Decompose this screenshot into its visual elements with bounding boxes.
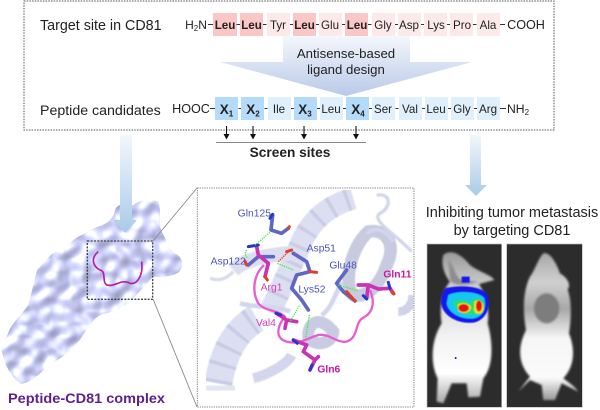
target sequence row: Ala — [480, 19, 497, 32]
target sequence row: Lys — [427, 19, 445, 32]
heading: peptide candidates: Peptide candidates — [40, 103, 161, 119]
candidate sequence row: Leu — [321, 103, 341, 116]
arrow: to tumor inhibition — [465, 135, 487, 196]
arrow: to peptide-CD81 complex — [113, 135, 137, 233]
hydrogen bonds — [245, 232, 358, 338]
target sequence row — [185, 13, 545, 36]
candidate sequence row: 2 — [525, 108, 530, 117]
treated mouse photo — [507, 244, 582, 407]
target sequence row: Leu — [347, 19, 367, 32]
surface blob — [2, 200, 182, 384]
atom tips — [245, 214, 394, 370]
target sequence row: N — [198, 18, 207, 32]
residue labels peptide: Arg1 — [261, 283, 283, 294]
icon: screen site arrows — [224, 126, 359, 140]
candidate sequence row — [172, 97, 530, 120]
residue labels CD81: Glu48 — [329, 260, 357, 271]
panel: binding detail — [197, 188, 414, 407]
heading: target site: Target site in CD81 — [40, 18, 162, 34]
candidate sequence row: 2 — [255, 110, 260, 118]
candidate sequence row: Leu — [426, 103, 446, 116]
candidate sequence row: Arg — [479, 103, 497, 116]
bioluminescence heatmap — [441, 277, 489, 323]
candidate sequence row: HOOC — [172, 102, 210, 116]
peptide residue sticks — [257, 247, 393, 370]
residue labels peptide: Val4 — [256, 318, 276, 329]
candidate sequence row: 1 — [229, 110, 234, 118]
panel: mouse imaging — [427, 244, 582, 407]
zoom connector lines — [153, 188, 197, 407]
text: antisense-based ligand design: ligand design — [307, 62, 385, 77]
candidate sequence row: Gly — [453, 103, 471, 116]
target sequence row: COOH — [507, 18, 545, 32]
target sequence row: Gly — [374, 19, 392, 32]
candidate sequence row: X — [298, 102, 307, 117]
peptide trace — [93, 252, 142, 285]
target sequence row: Leu — [294, 19, 315, 32]
label: peptide-CD81 complex: Peptide-CD81 complex — [8, 391, 166, 406]
candidate sequence row: X — [220, 102, 229, 117]
target sequence row: Glu — [321, 19, 339, 32]
residue labels CD81: Asp51 — [307, 244, 336, 255]
panel: sequence design box — [24, 1, 554, 130]
label: screen sites: Screen sites — [250, 145, 331, 160]
heading: inhibiting tumor metastasis: Inhibiting tumor metastasis — [426, 205, 598, 221]
peptide backbone — [254, 265, 373, 343]
candidate sequence row: X — [351, 102, 360, 117]
target sequence row: Pro — [453, 19, 471, 32]
residue labels peptide: Gln11 — [383, 270, 412, 281]
target sequence row: Asp — [399, 19, 419, 32]
screen sites bracket line — [216, 142, 366, 144]
CD81 residue sticks — [248, 215, 355, 310]
residue labels CD81: Gln125 — [238, 208, 271, 219]
residue labels peptide: Gln6 — [317, 364, 341, 375]
candidate sequence row: 4 — [360, 110, 365, 118]
residue labels CD81: Lys52 — [298, 284, 326, 295]
residue labels CD81 — [211, 208, 357, 295]
target sequence row: Leu — [241, 19, 262, 32]
target sequence row: H — [185, 18, 194, 32]
candidate sequence row: Ser — [374, 103, 392, 116]
treated-control mouse photo — [427, 244, 502, 407]
candidate sequence row: NH — [507, 102, 525, 116]
residue labels peptide — [256, 270, 412, 375]
heading: inhibiting tumor metastasis: by targeting CD81 — [454, 223, 570, 239]
candidate sequence row: Ile — [273, 103, 285, 116]
cartoon ribbons — [206, 195, 413, 388]
candidate sequence row: 3 — [307, 110, 312, 118]
target sequence row: Tyr — [270, 19, 286, 32]
target sequence row: 2 — [194, 24, 199, 33]
candidate sequence row: Val — [402, 103, 418, 116]
text: antisense-based ligand design: Antisense-based — [297, 46, 395, 61]
candidate sequence row: X — [246, 102, 255, 117]
target sequence row: Leu — [215, 19, 235, 32]
arrow: antisense-based ligand design — [220, 36, 472, 96]
panel: protein surface — [2, 200, 182, 384]
residue labels CD81: Asp122 — [211, 256, 246, 267]
dotted selection square — [87, 241, 153, 299]
salt bridge — [278, 250, 290, 262]
